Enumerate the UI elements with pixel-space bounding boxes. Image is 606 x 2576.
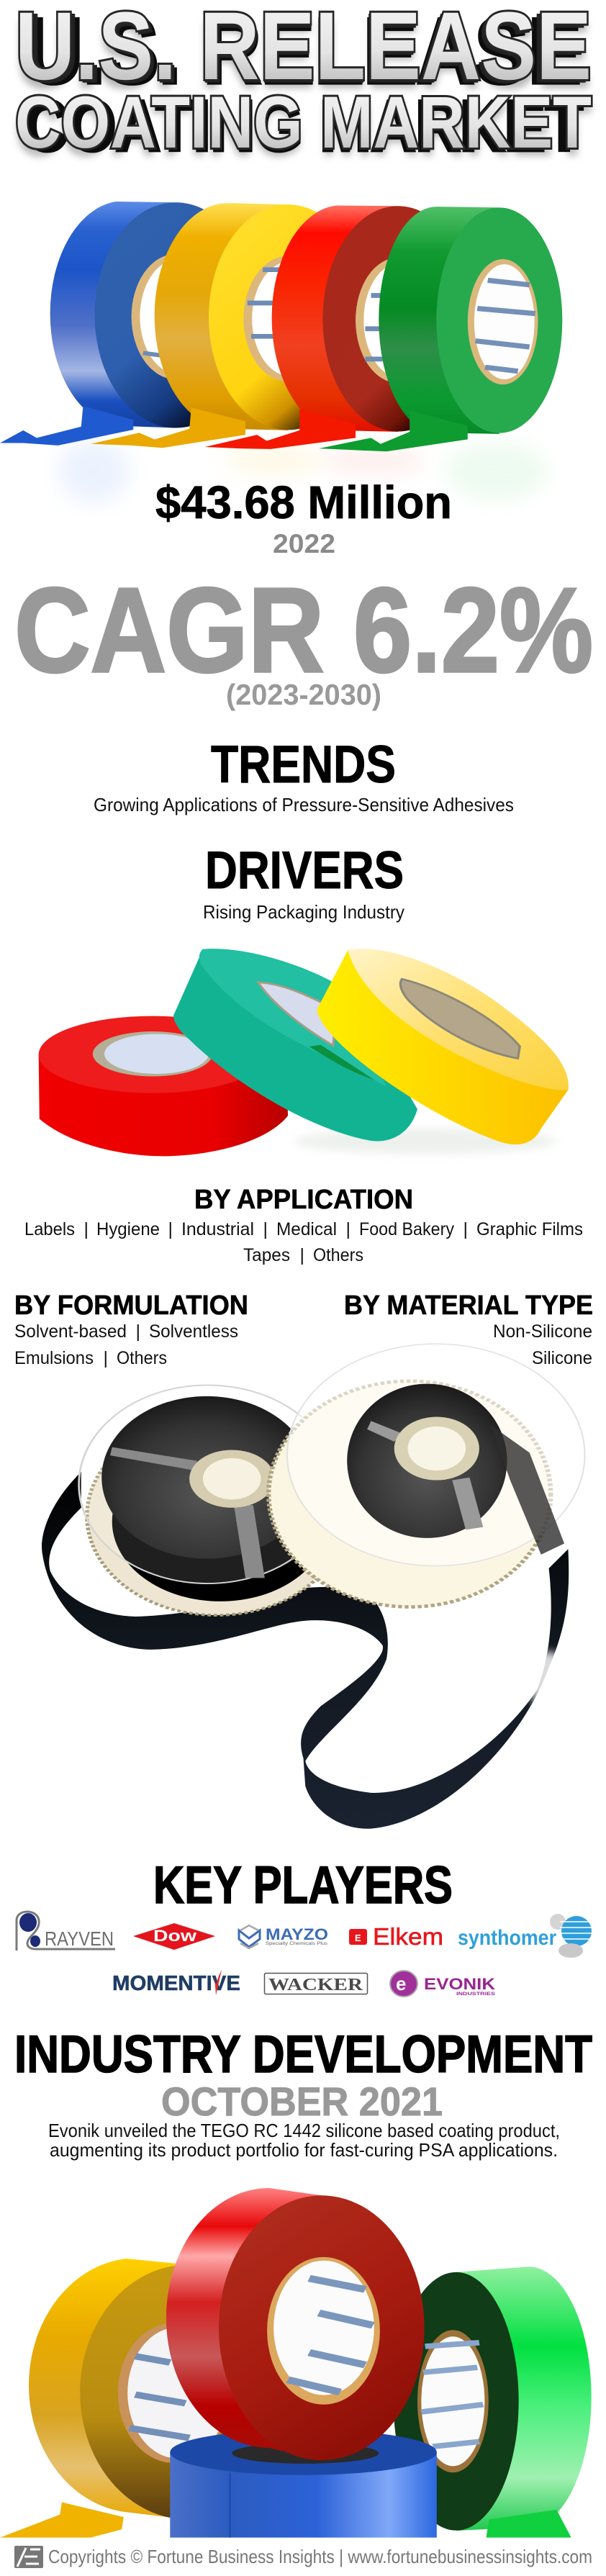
by application list: Graphic Films — [476, 1219, 583, 1239]
market size value: $43.68 Million — [155, 476, 452, 528]
blue roll — [170, 2429, 437, 2538]
trends text: Growing Applications of Pressure-Sensitive Adhesives — [94, 794, 514, 815]
market size year: 2022 — [273, 529, 335, 559]
image: three tape rolls — [39, 949, 569, 1156]
by formulation heading: BY FORMULATION — [14, 1291, 248, 1321]
logo: Elkem: E — [355, 1933, 361, 1943]
by application list: Labels — [24, 1219, 75, 1239]
by application list: | — [345, 1219, 351, 1239]
green roll — [394, 2267, 592, 2538]
ribbon fade — [530, 1651, 568, 1712]
logos — [17, 1912, 593, 1997]
reflection under rolls — [58, 439, 547, 504]
loose ribbon — [42, 1472, 569, 1829]
development text: augmenting its product portfolio for fast-curing PSA applications. — [50, 2139, 558, 2161]
logo: Synthomer: synthomer — [458, 1926, 556, 1950]
icon: Fortune Business Insights logo — [14, 2546, 43, 2568]
red roll — [39, 1016, 288, 1156]
red roll — [205, 205, 474, 449]
logo: Wacker — [265, 1974, 367, 1994]
logo: Evonik — [390, 1971, 496, 1997]
by formulation list — [14, 1321, 238, 1368]
logo: Rayven — [17, 1912, 115, 1951]
by application list: Hygiene — [96, 1219, 160, 1239]
logo: Wacker: WACKER — [268, 1976, 363, 1994]
drivers text: Rising Packaging Industry — [203, 901, 404, 923]
title — [15, 0, 592, 171]
logo: Synthomer — [458, 1914, 593, 1958]
image: four coloured tape rolls — [0, 202, 562, 504]
logo: Dow — [133, 1923, 215, 1950]
by application list: | — [463, 1219, 468, 1239]
yellow roll — [91, 203, 367, 448]
right reel — [268, 1344, 584, 1607]
yellow roll — [317, 949, 569, 1144]
yellow roll — [0, 2259, 297, 2538]
by formulation list: | — [104, 1348, 108, 1368]
by application list: Others — [313, 1245, 363, 1265]
development text — [48, 2120, 560, 2161]
logo: Mayzo: MAYZO — [266, 1925, 328, 1943]
by material type list — [493, 1321, 592, 1368]
logo: Elkem — [349, 1923, 443, 1950]
development date: OCTOBER 2021 — [161, 2079, 443, 2124]
green roll — [319, 207, 562, 451]
drivers heading: DRIVERS — [205, 841, 404, 900]
by application list: Tapes — [243, 1245, 290, 1265]
development text: Evonik unveiled the TEGO RC 1442 silicone based coating product, — [48, 2120, 560, 2141]
by application list: | — [83, 1219, 89, 1239]
logo: Momentive: MOMENTIVE — [112, 1972, 240, 1995]
by formulation list: Solvent-based — [14, 1321, 127, 1342]
by application heading: BY APPLICATION — [194, 1185, 413, 1215]
red roll — [166, 2188, 425, 2460]
by material type list: Non-Silicone — [493, 1321, 592, 1342]
image: film reels with loose tape — [42, 1344, 584, 1829]
logo: Dow: Dow — [153, 1927, 197, 1945]
by formulation list: Emulsions — [14, 1348, 94, 1368]
CAGR period: (2023-2030) — [226, 678, 381, 711]
by application list: Food Bakery — [359, 1219, 454, 1239]
key players heading: KEY PLAYERS — [153, 1856, 453, 1915]
logo: Elkem: Elkem — [373, 1923, 443, 1950]
by application list: Industrial — [181, 1219, 254, 1239]
image: stacked tape rolls — [0, 2188, 592, 2538]
teal roll — [173, 949, 417, 1142]
by formulation list: | — [135, 1321, 140, 1342]
by application list: | — [299, 1245, 304, 1265]
by material type list: Silicone — [532, 1348, 592, 1368]
logo: Evonik: EVONIK — [424, 1975, 495, 1993]
logo: Evonik: INDUSTRIES — [456, 1992, 496, 1997]
left reel — [79, 1386, 346, 1615]
footer — [14, 2546, 592, 2568]
by application list — [24, 1219, 583, 1265]
blue roll — [0, 202, 257, 446]
by formulation list: Solventless — [149, 1321, 238, 1342]
soft shadow — [294, 1129, 556, 1154]
trends heading: TRENDS — [211, 736, 396, 794]
by application list: Medical — [276, 1219, 337, 1239]
logo: Evonik: e — [396, 1973, 406, 1994]
logo: Rayven: RAYVEN — [45, 1928, 114, 1950]
by application list: | — [168, 1219, 173, 1239]
by application list: | — [263, 1219, 268, 1239]
by material type heading: BY MATERIAL TYPE — [344, 1291, 593, 1321]
logo: Mayzo: Specialty Chemicals Plus — [266, 1941, 328, 1946]
logo: Mayzo — [239, 1925, 328, 1948]
by formulation list: Others — [117, 1348, 167, 1368]
